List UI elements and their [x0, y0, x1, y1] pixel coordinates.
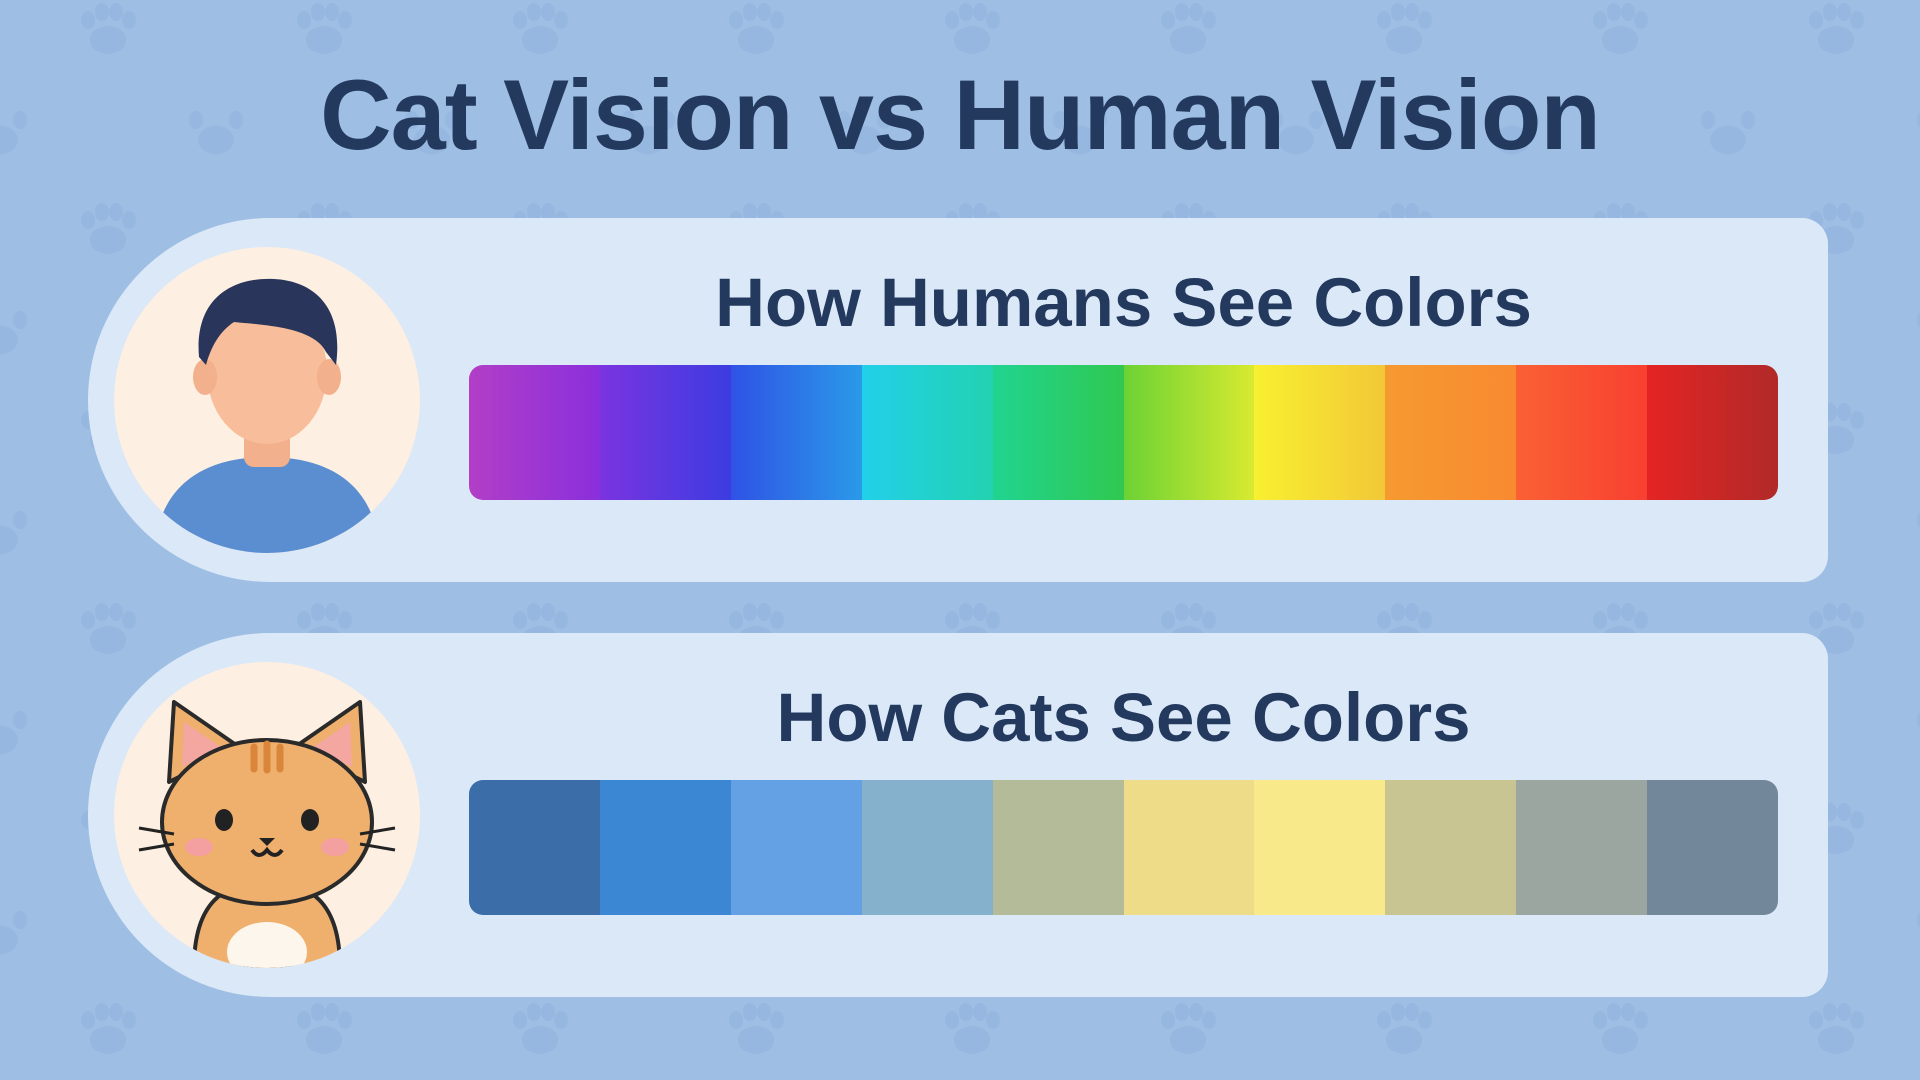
bar: cat color palette: [469, 780, 1778, 915]
panel: cats: [88, 633, 1828, 997]
panel: humans: [88, 218, 1828, 582]
heading: how cats see colors: How Cats See Colors: [776, 679, 1470, 756]
icon: cat avatar: [114, 662, 420, 968]
bar: human color spectrum: [469, 365, 1778, 500]
heading: how humans see colors: How Humans See Colors: [715, 264, 1532, 341]
icon: human avatar: [114, 247, 420, 553]
title: Cat Vision vs Human Vision: [320, 59, 1600, 170]
